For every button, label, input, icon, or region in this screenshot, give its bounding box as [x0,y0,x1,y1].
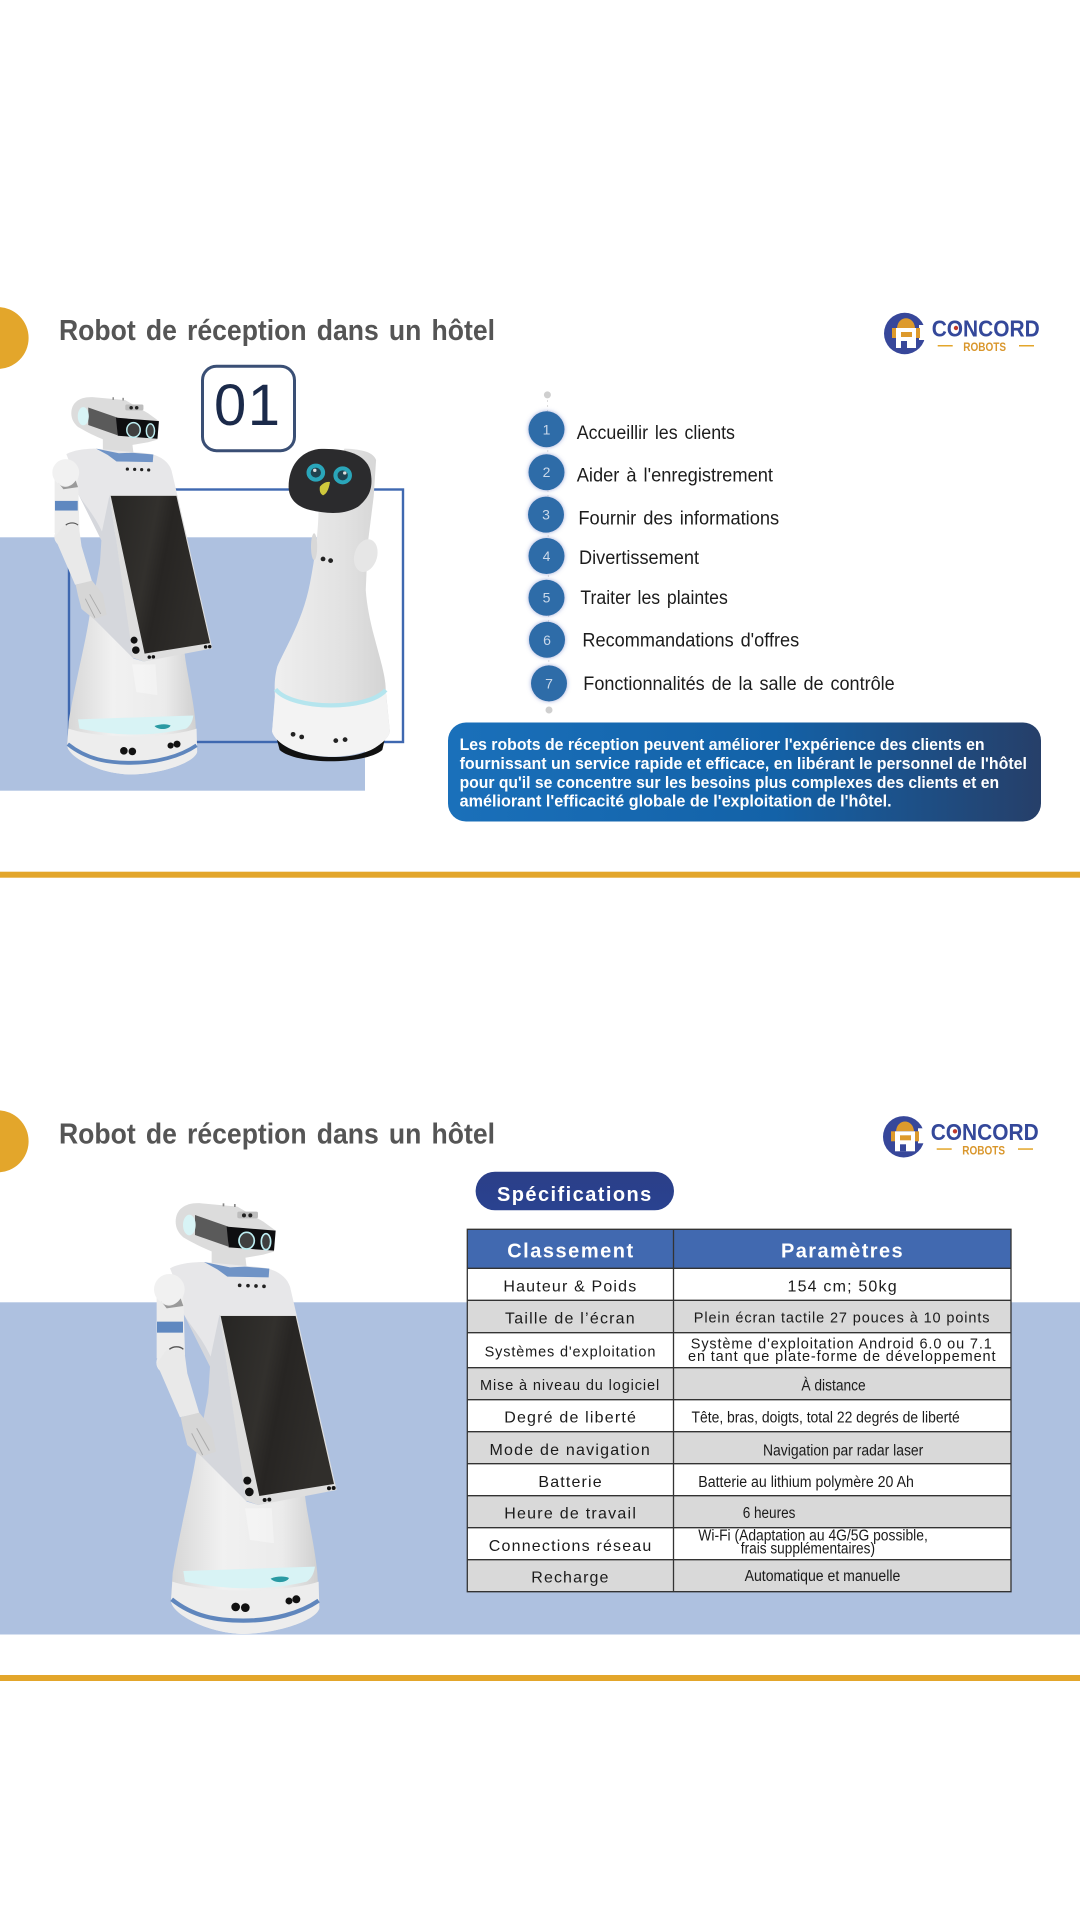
list item 2: 2 [543,464,551,480]
list item 3 [528,497,779,533]
table cells: Recharge [531,1569,608,1586]
logo: Concord Robots slide 1: ROBOTS [963,340,1006,354]
table cells: Automatique et manuelle [745,1568,900,1585]
callout: benefits text: fournissant un service rapide et efficace, en libérant le personnel de l'hôtel [460,755,1027,773]
divider: gold rule slide 1 [0,872,1080,878]
list item 3: Fournir des informations [578,509,779,530]
heading pill: Spécifications [476,1172,674,1210]
divider: gold rule slide 2 [0,1675,1080,1681]
list item 6: 6 [543,632,551,648]
icon: gold semicircle slide 2 [0,1110,29,1172]
frame: blue outline behind robots [69,490,403,742]
list item 6: Recommandations d'offres [582,631,799,652]
table cells: Mise à niveau du logiciel [480,1378,659,1394]
list item 2: Aider à l'enregistrement [577,465,774,486]
table cells: Plein écran tactile 27 pouces à 10 points [694,1311,990,1327]
table header: Paramètres [781,1241,903,1263]
list item 6 [529,622,799,658]
number badge 01 [202,366,294,451]
list item 7 [531,665,895,701]
table cells: Degré de liberté [504,1409,636,1426]
table cells: Connections réseau [489,1538,651,1555]
table cells: en tant que plate-forme de développement [688,1349,996,1365]
table cells: Hauteur & Poids [503,1278,636,1295]
table cells: 6 heures [743,1505,796,1522]
logo: Concord Robots slide 1 [884,313,1040,354]
icon: gold semicircle slide 1 [0,307,29,369]
logo: Concord Robots slide 2 [883,1116,1039,1158]
list item 2 [528,454,774,490]
table cells: Batterie au lithium polymère 20 Ah [698,1474,914,1491]
table header: Classement [507,1241,634,1263]
list: robot functions [528,391,895,714]
table cells: Taille de l’écran [505,1310,635,1327]
logo: Concord Robots slide 2: CONCORD [931,1119,1039,1145]
callout: benefits text: pour qu'il se concentre sur les besoins plus complexes des clients et en [460,774,999,792]
list item 5: Traiter les plaintes [580,588,728,609]
logo: Concord Robots slide 2: ROBOTS [962,1143,1005,1157]
list item 1: Accueillir les clients [577,423,735,444]
table cells [480,1278,996,1586]
illustration: owl-face robot [272,449,390,761]
table: specifications [467,1229,1011,1592]
table cells: Mode de navigation [490,1442,650,1459]
illustration: humanoid robot with screen [52,397,212,775]
illustration: humanoid robot slide 2 [154,1203,337,1634]
table cells: Batterie [538,1474,602,1491]
table cells: À distance [801,1378,866,1395]
list item 5: 5 [543,590,551,606]
list item 4 [528,538,700,574]
list item 3: 3 [542,507,550,523]
table cells: Heure de travail [504,1506,636,1523]
panel: slide 1 background band [0,537,365,791]
heading pill: Spécifications: Spécifications [497,1184,651,1206]
table header [507,1241,903,1263]
table row fills [467,1229,1011,1592]
list item 5 [528,580,728,616]
table cells: frais supplémentaires) [741,1541,875,1558]
title: slide 1: Robot de réception dans un hôtel [59,315,495,347]
list item 1: 1 [543,421,551,437]
list item 7: Fonctionnalités de la salle de contrôle [583,674,895,695]
logo: Concord Robots slide 1: CONCORD [932,316,1040,342]
title: slide 2: Robot de réception dans un hôtel [59,1118,495,1150]
callout: benefits text: Les robots de réception peuvent améliorer l'expérience des clients en [460,736,985,754]
callout: benefits text: améliorant l'efficacité globale de l'exploitation de l'hôtel. [460,793,892,811]
table cells: Systèmes d'exploitation [485,1345,655,1361]
list item 4: Divertissement [579,548,700,569]
table cells: 154 cm; 50kg [788,1278,897,1295]
table cells: Wi-Fi (Adaptation au 4G/5G possible, [698,1528,928,1545]
number badge 01: 01 [214,373,280,438]
list item 7: 7 [545,675,553,691]
panel: slide 2 background band [0,1302,1080,1634]
list item 4: 4 [543,548,551,564]
table cells: Navigation par radar laser [763,1442,923,1459]
table cells: Tête, bras, doigts, total 22 degrés de liberté [692,1410,960,1427]
callout: benefits text [448,722,1041,822]
list item 1 [528,411,735,447]
table cells: Système d'exploitation Android 6.0 ou 7.1 [691,1336,992,1352]
